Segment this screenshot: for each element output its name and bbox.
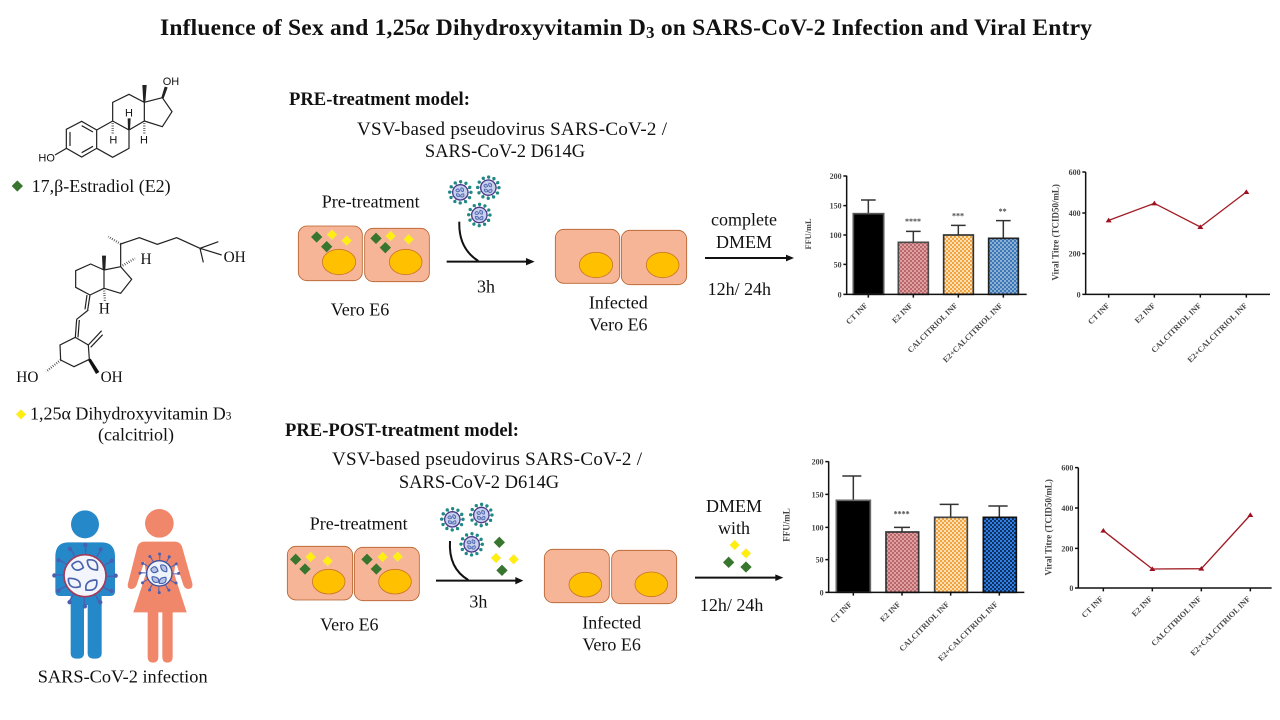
chart: FFU bars pre-post-treatment: 0 bbox=[820, 588, 824, 597]
label: infected Vero E6: Vero E6 bbox=[589, 315, 648, 335]
chart: FFU bars pre-treatment: CT INF bbox=[844, 301, 869, 326]
label: Vero E6: Vero E6 bbox=[320, 614, 379, 634]
title: 3 bbox=[646, 23, 655, 42]
label: infected Vero E6: Infected bbox=[589, 292, 648, 312]
chart: FFU bars pre-treatment: *** bbox=[952, 211, 964, 220]
panel: sex icons bbox=[38, 509, 208, 686]
infected cells bbox=[544, 549, 677, 604]
chart: FFU bars pre-treatment: 150 bbox=[830, 202, 842, 211]
label: DMEM with: with bbox=[718, 518, 750, 538]
legend: calcitriol bbox=[16, 403, 232, 446]
chart: viral titre line pre-treatment: 600 bbox=[1069, 168, 1081, 177]
chart: FFU bars pre-post-treatment: FFU/mL bbox=[781, 508, 791, 542]
molecule: estradiol: H bbox=[140, 134, 148, 146]
legend: calcitriol: 1,25α Dihydroxyvitamin D3 bbox=[30, 403, 232, 423]
chart: FFU bars pre-treatment: CALCITRIOL INF bbox=[906, 301, 959, 355]
icon: viruses and compounds bbox=[442, 504, 519, 576]
chart: FFU bars pre-treatment: 100 bbox=[830, 231, 842, 240]
chart: FFU bars pre-treatment bbox=[804, 172, 1027, 364]
chart: viral titre line pre-treatment: 0 bbox=[1077, 290, 1081, 299]
panel: compounds bbox=[12, 76, 246, 446]
title: on SARS-CoV-2 Infection and Viral Entry bbox=[655, 15, 1092, 41]
title: Influence of Sex and 1,25α Dihydroxyvitamin D bbox=[160, 15, 646, 41]
text: pseudovirus: VSV-based pseudovirus SARS-CoV-2 / bbox=[332, 449, 643, 470]
legend: estradiol: 17,β-Estradiol (E2) bbox=[32, 176, 171, 197]
arrow: 3h infection bbox=[436, 541, 523, 584]
molecule: calcitriol: H bbox=[140, 251, 152, 268]
icon: male figure with virus bbox=[54, 510, 116, 659]
label: infected Vero E6: Infected bbox=[582, 612, 641, 632]
chart: viral titre line pre-post-treatment: 200 bbox=[1061, 544, 1073, 553]
chart: FFU bars pre-post-treatment: 150 bbox=[812, 490, 824, 499]
chart: FFU bars pre-post-treatment: CALCITRIOL INF bbox=[897, 600, 951, 653]
chart: viral titre line pre-post-treatment: CT INF bbox=[1080, 594, 1105, 620]
text: pseudovirus: SARS-CoV-2 D614G bbox=[399, 473, 559, 493]
molecule: calcitriol: OH bbox=[224, 249, 246, 266]
molecule: estradiol bbox=[38, 76, 179, 164]
chart: viral titre line pre-treatment: E2 INF bbox=[1133, 301, 1157, 325]
chart: FFU bars pre-treatment: 0 bbox=[838, 290, 842, 299]
molecule: estradiol: H bbox=[109, 134, 117, 146]
treated cells bbox=[298, 226, 429, 282]
chart: viral titre line pre-post-treatment: CALCITRIOL INF bbox=[1149, 594, 1203, 648]
label: pre-treatment: Pre-treatment bbox=[310, 513, 408, 533]
label: infected Vero E6 bbox=[589, 292, 648, 335]
chart: FFU bars pre-post-treatment: 50 bbox=[816, 556, 824, 565]
chart: FFU bars pre-treatment: FFU/mL bbox=[804, 218, 813, 249]
molecule: estradiol: OH bbox=[163, 76, 179, 88]
heading: PRE-POST-treatment model: PRE-POST-treatment model: bbox=[285, 420, 519, 441]
infected cells bbox=[555, 229, 687, 285]
arrow: 3h infection bbox=[447, 222, 535, 265]
chart: viral titre line pre-post-treatment bbox=[1044, 464, 1272, 658]
molecule: estradiol: HO bbox=[38, 152, 55, 164]
chart: FFU bars pre-post-treatment: **** bbox=[894, 510, 910, 519]
molecule: calcitriol: OH bbox=[101, 369, 123, 386]
chart: FFU bars pre-treatment: E2 INF bbox=[890, 301, 914, 325]
label: infected Vero E6 bbox=[582, 612, 641, 655]
chart: viral titre line pre-treatment: E2+CALCITRIOL INF bbox=[1186, 301, 1249, 364]
chart: FFU bars pre-treatment: E2+CALCITRIOL INF bbox=[941, 301, 1004, 364]
chart: FFU bars pre-treatment: **** bbox=[905, 217, 921, 226]
text: pseudovirus: SARS-CoV-2 D614G bbox=[425, 142, 585, 162]
chart: FFU bars pre-treatment: 50 bbox=[834, 260, 842, 269]
panel: pre-treatment workflow bbox=[298, 177, 794, 335]
label: 12h/24h: 12h/ 24h bbox=[708, 279, 771, 299]
label: DMEM with bbox=[706, 496, 762, 538]
chart: viral titre line pre-treatment bbox=[1050, 168, 1270, 364]
label: infected Vero E6: Vero E6 bbox=[582, 635, 641, 655]
chart: viral titre line pre-treatment: Viral Titre (TCID50/mL) bbox=[1050, 184, 1060, 281]
label: Vero E6: Vero E6 bbox=[331, 299, 389, 319]
label: 12h/24h: 12h/ 24h bbox=[700, 595, 763, 615]
chart: FFU bars pre-post-treatment: 100 bbox=[812, 523, 824, 532]
label: SARS-CoV-2 infection: SARS-CoV-2 infection bbox=[38, 666, 208, 686]
label: complete DMEM: complete bbox=[711, 210, 777, 230]
chart: viral titre line pre-treatment: CALCITRIOL INF bbox=[1149, 301, 1203, 355]
icon: viruses bbox=[450, 177, 499, 226]
chart: FFU bars pre-post-treatment: CT INF bbox=[829, 600, 854, 625]
molecule: calcitriol: H bbox=[99, 300, 110, 317]
panel: pre-post-treatment workflow bbox=[287, 496, 783, 655]
chart: viral titre line pre-post-treatment: Viral Titre (TCID50/mL) bbox=[1044, 479, 1054, 576]
chart: FFU bars pre-post-treatment bbox=[781, 458, 1024, 663]
heading: PRE-treatment model: PRE-treatment model: bbox=[289, 89, 470, 110]
chart: FFU bars pre-treatment: ** bbox=[999, 207, 1007, 216]
text: pseudovirus bbox=[357, 119, 668, 162]
chart: viral titre line pre-post-treatment: 400 bbox=[1061, 504, 1073, 513]
chart: viral titre line pre-treatment: 200 bbox=[1069, 250, 1081, 259]
chart: FFU bars pre-post-treatment: 200 bbox=[812, 458, 824, 467]
label: complete DMEM bbox=[711, 210, 777, 252]
label: 3h: 3h bbox=[477, 277, 495, 297]
arrow: incubation bbox=[695, 574, 783, 581]
molecule: calcitriol: HO bbox=[16, 369, 38, 386]
chart: viral titre line pre-post-treatment: 0 bbox=[1069, 584, 1073, 593]
icon: compounds in medium bbox=[723, 540, 752, 573]
chart: viral titre line pre-treatment: 400 bbox=[1069, 209, 1081, 218]
molecule: estradiol: H bbox=[125, 108, 133, 120]
chart: viral titre line pre-post-treatment: E2 INF bbox=[1130, 594, 1154, 618]
icon: female figure with virus bbox=[128, 509, 192, 663]
label: complete DMEM: DMEM bbox=[716, 232, 772, 252]
label: pre-treatment: Pre-treatment bbox=[322, 192, 420, 212]
label: 3h: 3h bbox=[469, 592, 487, 612]
treated cells bbox=[287, 546, 419, 601]
chart: viral titre line pre-treatment: CT INF bbox=[1086, 301, 1111, 326]
text: pseudovirus: VSV-based pseudovirus SARS-CoV-2 / bbox=[357, 119, 668, 140]
arrow: incubation bbox=[705, 255, 794, 261]
chart: viral titre line pre-post-treatment: 600 bbox=[1061, 464, 1073, 473]
chart: FFU bars pre-post-treatment: E2+CALCITRIOL INF bbox=[936, 600, 1000, 663]
chart: viral titre line pre-post-treatment: E2+CALCITRIOL INF bbox=[1189, 594, 1252, 658]
chart: FFU bars pre-post-treatment: E2 INF bbox=[878, 600, 902, 624]
label: DMEM with: DMEM bbox=[706, 496, 762, 516]
text: pseudovirus bbox=[332, 449, 643, 493]
legend: calcitriol: (calcitriol) bbox=[98, 425, 174, 446]
molecule: calcitriol bbox=[16, 237, 246, 386]
chart: FFU bars pre-treatment: 200 bbox=[830, 172, 842, 181]
